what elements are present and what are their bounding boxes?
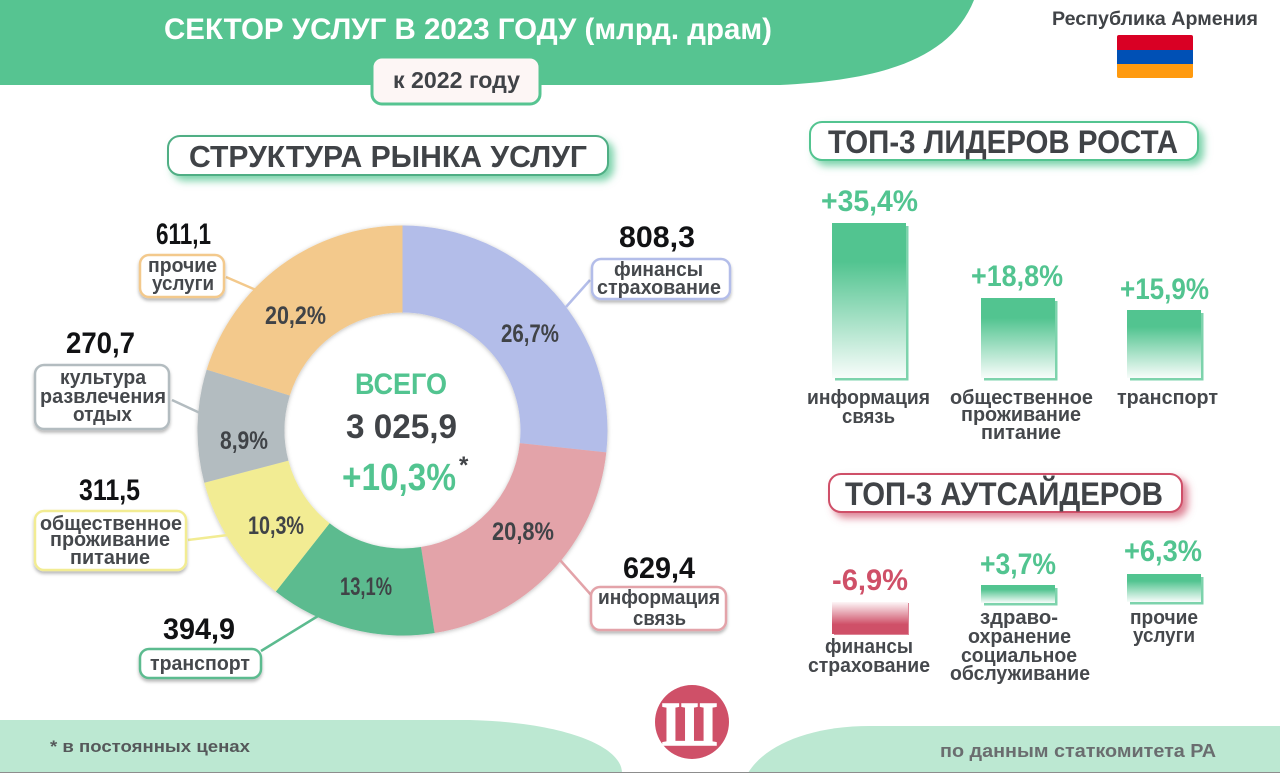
callout: culture and recreation: отдых [73,404,132,426]
callout: culture and recreation: развлечения [40,386,166,408]
callout: culture and recreation [35,327,200,429]
bar: information and communication +35,4%: информация [807,387,930,409]
bar: finance and insurance -6,9%: финансы [825,636,913,658]
footer band left [0,720,622,773]
callout: accommodation and catering: общественное [40,513,182,535]
callout: other services: прочие [148,255,217,277]
callout: accommodation and catering [35,474,228,570]
bar: information and communication +35,4%: +35,4% [821,185,918,218]
bar: other services +6,3%: прочие [1130,607,1198,629]
bar: other services +6,3% [1124,535,1204,647]
donut share labels: 13,1% [340,573,392,601]
bar: healthcare and social services +3,7%: охранение [968,626,1071,648]
callout: transport [140,613,318,678]
bar: accommodation and catering +18,8%: общественное [950,387,1093,409]
donut share labels: 20,8% [492,518,554,546]
bar: accommodation and catering +18,8%: проживание [961,404,1081,426]
callout: accommodation and catering: 311,5 [79,474,140,507]
bar: healthcare and social services +3,7% [950,548,1090,685]
icon: Armenian flag [1117,35,1193,78]
heading: top-3 growth leaders: ТОП-3 ЛИДЕРОВ РОСТА [828,124,1178,160]
donut share labels: 20,2% [265,302,326,330]
bar: accommodation and catering +18,8%: +18,8% [971,260,1063,293]
heading: market structure: СТРУКТУРА РЫНКА УСЛУГ [189,139,587,174]
bar: accommodation and catering +18,8% [950,260,1093,444]
footer band right [748,726,1280,773]
bar: transport +15,9%: транспорт [1117,387,1218,409]
bar: healthcare and social services +3,7%: +3,7% [980,548,1056,581]
donut share labels: 10,3% [248,512,304,540]
bar: other services +6,3%: услуги [1133,625,1195,647]
callout: accommodation and catering: питание [70,547,150,569]
callout: culture and recreation: 270,7 [66,327,135,360]
donut center total: * [459,452,469,479]
callout: finance and insurance: финансы [614,259,703,281]
callout: information and communication [560,552,726,630]
footnote: * в постоянных ценах [50,737,251,756]
donut share labels: 26,7% [501,320,559,348]
bar: finance and insurance -6,9%: страхование [808,655,930,677]
donut chart [197,226,607,636]
callout: transport: транспорт [150,653,250,675]
title: СЕКТОР УСЛУГ В 2023 ГОДУ (млрд. драм) [164,13,772,46]
bar: healthcare and social services +3,7%: здраво- [980,607,1058,629]
bar: other services +6,3%: +6,3% [1124,535,1202,568]
callout: information and communication: 629,4 [623,552,695,585]
logo: Ш [662,691,717,759]
source note: по данным статкомитета РА [940,741,1216,761]
country label: Республика Армения [1052,9,1258,30]
heading: top-3 outsiders: ТОП-3 АУТСАЙДЕРОВ [845,476,1163,512]
callout: accommodation and catering: проживание [50,529,170,551]
donut center total: +10,3% [342,457,456,499]
callout: culture and recreation: культура [60,367,147,389]
subtitle badge [372,57,540,104]
callout: finance and insurance: страхование [597,277,721,299]
callout: transport: 394,9 [163,613,235,646]
donut share labels [220,302,559,601]
bar: finance and insurance -6,9% [808,564,930,677]
callout: information and communication: связь [633,608,686,630]
bar: information and communication +35,4% [807,185,930,428]
bar: transport +15,9% [1117,273,1218,409]
callout: information and communication: информация [598,587,720,609]
bar: healthcare and social services +3,7%: обслуживание [950,663,1090,685]
bar: finance and insurance -6,9%: -6,9% [832,564,908,597]
donut share labels: 8,9% [220,427,268,455]
callout: other services [140,218,256,297]
subtitle badge: к 2022 году [393,67,520,93]
donut center total: ВСЕГО [355,368,447,401]
callout: other services: 611,1 [156,218,211,251]
header banner [0,0,974,85]
bar: information and communication +35,4%: связь [842,406,895,428]
callout: finance and insurance: 808,3 [619,221,695,254]
callout: finance and insurance [566,221,730,307]
callout: other services: услуги [152,273,214,295]
donut center total [342,368,469,499]
donut center total: 3 025,9 [346,408,457,446]
bar: healthcare and social services +3,7%: социальное [961,645,1077,667]
bar: accommodation and catering +18,8%: питание [981,422,1061,444]
bar: transport +15,9%: +15,9% [1120,273,1209,306]
